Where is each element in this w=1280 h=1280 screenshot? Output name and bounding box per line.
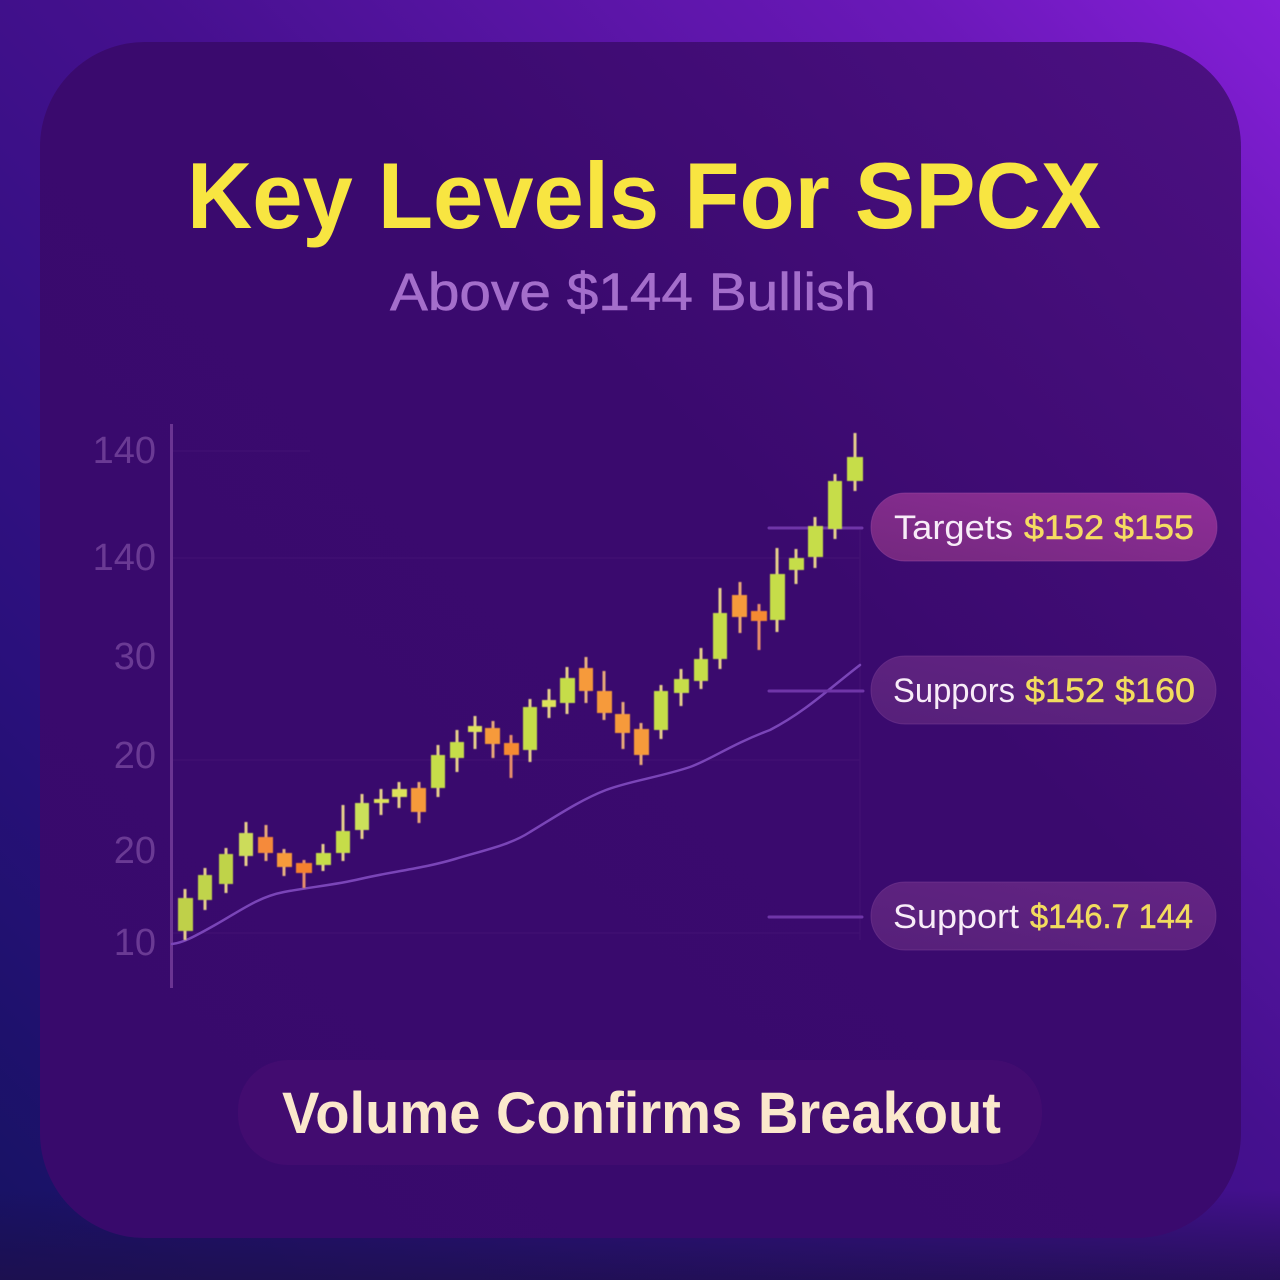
y axis labels: 140 bbox=[93, 430, 156, 472]
callout: targets pill: Targets bbox=[894, 509, 1013, 547]
callout: targets pill bbox=[871, 493, 1217, 561]
y axis line bbox=[170, 424, 173, 988]
callout: support levels pill: $152 $160 bbox=[1025, 672, 1195, 710]
callout: support pill: $146.7 144 bbox=[1030, 898, 1193, 936]
callout: targets pill: $152 $155 bbox=[1024, 509, 1194, 547]
y axis labels: 10 bbox=[114, 922, 156, 964]
chart grid lines bbox=[172, 451, 860, 940]
y axis labels: 30 bbox=[114, 636, 156, 678]
footer: volume confirmation pill: Volume Confirms Breakout bbox=[282, 1081, 1001, 1146]
footer: volume confirmation pill bbox=[238, 1060, 1042, 1165]
y axis labels: 140 bbox=[93, 537, 156, 579]
level lines bbox=[769, 528, 863, 917]
candlesticks bbox=[178, 433, 863, 940]
callout: support pill bbox=[871, 882, 1216, 950]
y axis labels: 20 bbox=[114, 735, 156, 777]
y axis labels bbox=[93, 430, 156, 964]
callout: support levels pill bbox=[871, 656, 1216, 724]
moving average line bbox=[172, 665, 860, 944]
title: Key Levels For SPCX bbox=[187, 143, 1101, 248]
callout: support pill: Support bbox=[893, 898, 1020, 936]
subtitle: Above $144 Bullish bbox=[390, 263, 876, 322]
y axis labels: 20 bbox=[114, 830, 156, 872]
chart: candlestick price chart bbox=[93, 424, 863, 988]
callout: support levels pill: Suppors bbox=[893, 672, 1015, 710]
